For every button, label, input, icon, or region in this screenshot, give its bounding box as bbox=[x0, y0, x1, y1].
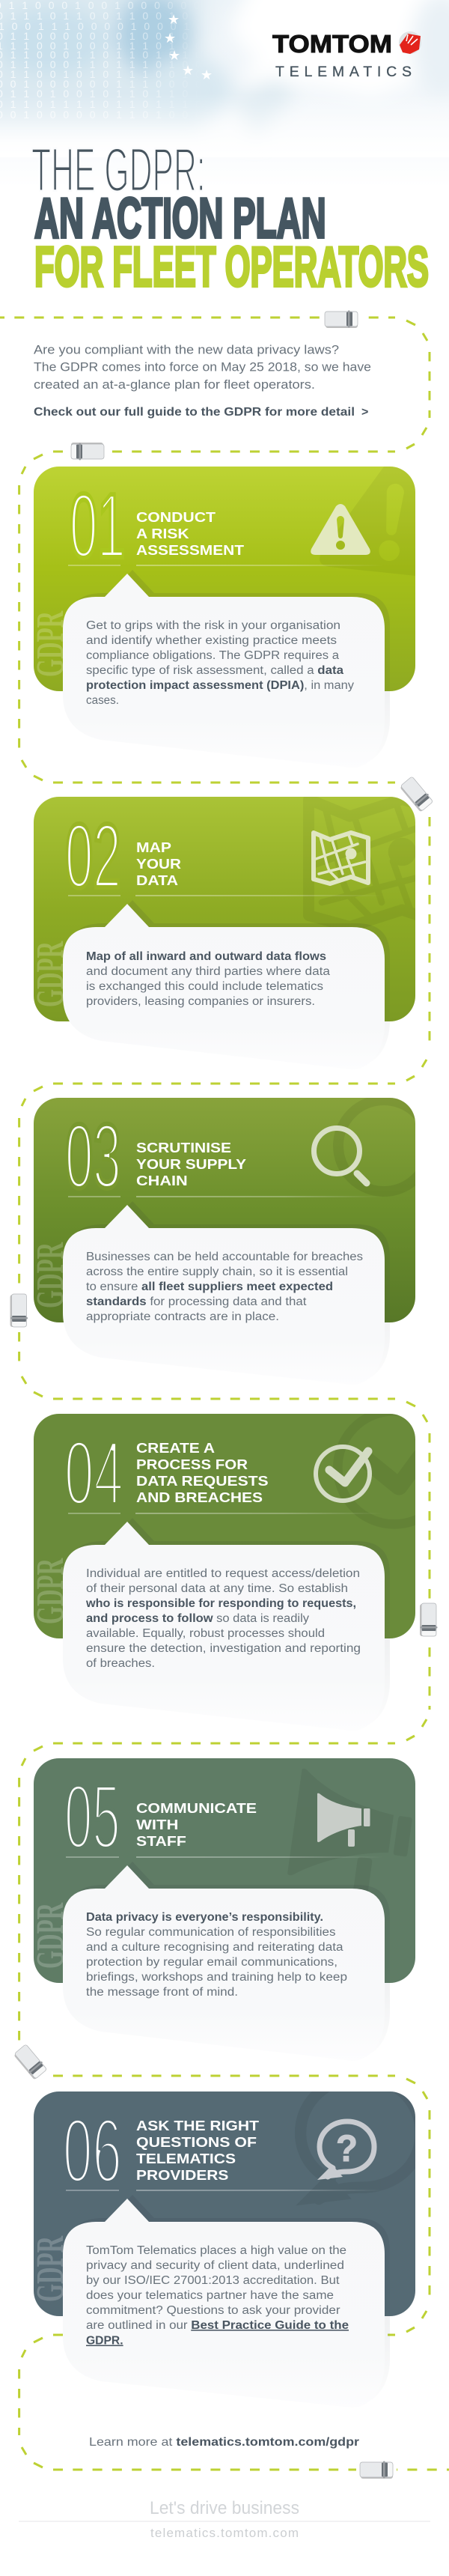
panel: step 06 ask the right questions: GDPR bbox=[29, 2235, 72, 2302]
number 04: 04 bbox=[64, 1423, 123, 1525]
callout with body text: protection impact assessment (DPIA) , in many bbox=[86, 679, 354, 692]
callout with body text bbox=[63, 1522, 385, 1731]
heading: CHAIN bbox=[136, 1173, 188, 1188]
icon: question speech bubble: ? bbox=[336, 2127, 358, 2169]
callout with body text: So regular communication of responsibilities bbox=[86, 1926, 336, 1939]
header background: data and map of Europe: 0 1 1 0 1 0 0 1 0 1 1 0 1 1 0 0 1 bbox=[0, 88, 217, 100]
header background: data and map of Europe: 0 1 1 0 0 0 0 0 0 0 1 0 0 1 0 0 0 bbox=[0, 30, 217, 42]
panel: step 01 conduct a risk assessment: GDPR bbox=[29, 610, 72, 677]
callout with body text: Map of all inward and outward data flows bbox=[86, 950, 326, 963]
van: corner right bbox=[397, 773, 436, 815]
header background: data and map of Europe: 0 1 1 0 0 1 0 1 0 1 1 1 0 0 1 0 0 bbox=[0, 68, 217, 80]
heading: A RISK bbox=[136, 526, 189, 541]
heading bbox=[136, 1441, 269, 1505]
header background: data and map of Europe: 0 1 1 0 1 1 1 1 0 1 1 0 1 1 1 0 0 bbox=[0, 98, 217, 110]
callout with body text: the message front of mind. bbox=[86, 1986, 238, 1999]
callout with body text: compliance obligations. The GDPR requires a bbox=[86, 649, 339, 662]
heading: PROCESS FOR bbox=[136, 1457, 248, 1472]
header background: data and map of Europe: ★ bbox=[168, 12, 180, 27]
logo: TomTom Telematics bbox=[272, 30, 421, 80]
callout with body text: to ensure all fleet suppliers meet expected bbox=[86, 1281, 333, 1293]
heading: DATA bbox=[136, 873, 178, 888]
header background: data and map of Europe: 1 1 1 0 0 1 0 0 0 1 1 1 0 1 0 0 1 bbox=[0, 40, 217, 52]
heading: QUESTIONS OF bbox=[136, 2135, 257, 2150]
icon: question speech bubble bbox=[317, 2121, 374, 2180]
icon: check mark bbox=[316, 1447, 370, 1501]
title: AN ACTION PLAN bbox=[34, 188, 326, 250]
panel: step 04 create a process: GDPR bbox=[29, 1558, 72, 1624]
panel: step 02 map your data bbox=[34, 797, 415, 1036]
callout with body text: by our ISO/IEC 27001:2013 accreditation. But bbox=[86, 2274, 340, 2287]
heading: CONDUCT bbox=[136, 510, 216, 525]
intro text: Are you compliant with the new data privacy laws? bbox=[34, 343, 339, 356]
number 06: 06 bbox=[63, 2100, 122, 2202]
heading: TELEMATICS bbox=[136, 2151, 236, 2166]
title bbox=[31, 135, 429, 299]
footer: telematics.tomtom.com bbox=[150, 2526, 299, 2540]
callout with body text: providers, leasing companies or insurers. bbox=[86, 995, 315, 1008]
van: second row bbox=[67, 443, 108, 460]
van: right side bbox=[420, 1600, 437, 1640]
footer: Let's drive business bbox=[150, 2498, 299, 2518]
callout with body text bbox=[63, 1865, 385, 2061]
callout with body text: and identify whether existing practice meets bbox=[86, 634, 337, 647]
intro text: > bbox=[361, 406, 368, 419]
callout with body text: of breaches. bbox=[86, 1657, 155, 1670]
callout with body text bbox=[63, 2199, 385, 2408]
title: THE GDPR: bbox=[31, 135, 206, 204]
header background: data and map of Europe: ★ bbox=[182, 63, 194, 78]
heading: STAFF bbox=[136, 1834, 186, 1849]
number 02: 02 bbox=[65, 805, 121, 907]
callout with body text: TomTom Telematics places a high value on the bbox=[86, 2244, 346, 2257]
heading bbox=[136, 510, 244, 558]
icon: magnifying glass bbox=[314, 1128, 367, 1183]
header background: data and map of Europe: 0 1 1 0 0 0 1 1 0 1 1 0 1 0 1 0 0 bbox=[0, 49, 217, 61]
callout with body text: and document any third parties where data bbox=[86, 965, 330, 978]
panel: step 05 communicate with staff bbox=[34, 1758, 415, 2022]
header background: data and map of Europe: 0 1 1 0 0 0 1 1 0 1 1 1 0 1 0 0 1 bbox=[0, 58, 217, 70]
heading bbox=[136, 840, 181, 888]
callout with body text: commitment? Questions to ask your provider bbox=[86, 2304, 340, 2317]
van: corner left bbox=[10, 2041, 50, 2083]
heading bbox=[136, 1140, 246, 1188]
learn more line: Learn more at telematics.tomtom.com/gdpr bbox=[89, 2436, 359, 2449]
heading: MAP bbox=[136, 840, 171, 855]
icon: megaphone bbox=[317, 1793, 370, 1847]
heading: YOUR SUPPLY bbox=[136, 1157, 246, 1172]
footer bbox=[19, 2498, 430, 2540]
panel: step 03 scrutinise your supply chain bbox=[34, 1098, 415, 1349]
callout with body text bbox=[63, 574, 385, 768]
callout with body text: and a culture recognising and reiterating data bbox=[86, 1941, 343, 1954]
van: bottom bbox=[356, 2461, 397, 2479]
number 05: 05 bbox=[64, 1766, 120, 1868]
heading: AND BREACHES bbox=[136, 1490, 263, 1505]
heading: SCRUTINISE bbox=[136, 1140, 231, 1155]
heading: PROVIDERS bbox=[136, 2168, 228, 2183]
header background: data and map of Europe bbox=[0, 0, 449, 187]
heading: ASSESSMENT bbox=[136, 543, 244, 558]
panel: step 03 scrutinise your supply chain: GDPR bbox=[29, 1242, 72, 1308]
icon: warning triangle bbox=[311, 504, 370, 555]
header background: data and map of Europe: 0 0 1 0 0 0 0 0 0 1 1 1 0 0 0 0 1 bbox=[0, 78, 217, 90]
heading: CREATE A bbox=[136, 1441, 215, 1456]
callout with body text: cases. bbox=[86, 694, 119, 707]
heading: ASK THE RIGHT bbox=[136, 2118, 259, 2133]
number 01: 01 bbox=[70, 475, 126, 577]
header background: data and map of Europe: ★ bbox=[164, 31, 176, 46]
logo: TomTom Telematics: TELEMATICS bbox=[275, 64, 412, 80]
callout with body text: Get to grips with the risk in your organisation bbox=[86, 619, 340, 632]
callout with body text: across the entire supply chain, so it is essential bbox=[86, 1266, 348, 1278]
callout with body text: Data privacy is everyone’s responsibility. bbox=[86, 1911, 323, 1924]
van: left side bbox=[10, 1290, 28, 1331]
number 03: 03 bbox=[65, 1105, 121, 1207]
callout with body text: and process to follow so data is readily bbox=[86, 1612, 309, 1625]
callout with body text: does your telematics partner have the same bbox=[86, 2289, 334, 2302]
callout with body text: protection by regular email communications, bbox=[86, 1956, 337, 1969]
callout with body text: is exchanged this could include telematics bbox=[86, 980, 323, 993]
callout with body text: of their personal data at any time. So establish bbox=[86, 1582, 348, 1595]
callout with body text: appropriate contracts are in place. bbox=[86, 1310, 279, 1323]
intro text: Check out our full guide to the GDPR for more detail bbox=[34, 406, 355, 419]
callout with body text: privacy and security of client data, underlined bbox=[86, 2259, 344, 2272]
callout with body text: GDPR. bbox=[86, 2335, 123, 2347]
title: FOR FLEET OPERATORS bbox=[34, 236, 429, 299]
panel: step 04 create a process bbox=[34, 1414, 415, 1689]
heading bbox=[136, 1801, 257, 1849]
logo: TomTom Telematics: TOMTOM bbox=[272, 30, 392, 58]
callout with body text: Businesses can be held accountable for breaches bbox=[86, 1251, 363, 1263]
panel: step 02 map your data: GDPR bbox=[29, 941, 72, 1007]
callout with body text bbox=[63, 1205, 385, 1385]
header background: data and map of Europe: 0 1 1 1 0 1 1 0 0 1 1 0 0 1 0 1 1 bbox=[0, 10, 217, 22]
callout with body text: are outlined in our Best Practice Guide to the bbox=[86, 2319, 349, 2332]
header background: data and map of Europe: 1 0 0 1 1 1 0 0 0 0 1 0 0 0 1 0 1 bbox=[0, 20, 219, 32]
panel: step 05 communicate with staff: GDPR bbox=[29, 1902, 72, 1969]
callout with body text: who is responsible for responding to requests, bbox=[85, 1597, 356, 1610]
callout with body text: standards for processing data and that bbox=[86, 1295, 307, 1308]
heading: YOUR bbox=[136, 857, 181, 872]
callout with body text: available. Equally, robust processes should bbox=[86, 1627, 325, 1640]
van: top bbox=[321, 310, 361, 328]
header background: data and map of Europe: ★ bbox=[201, 67, 213, 82]
intro text: created an at-a-glance plan for fleet operators. bbox=[34, 378, 315, 392]
callout with body text: ensure the detection, investigation and reporting bbox=[86, 1642, 361, 1655]
callout with body text bbox=[63, 904, 385, 1069]
heading: DATA REQUESTS bbox=[136, 1474, 269, 1489]
intro text: The GDPR comes into force on May 25 2018, so we have bbox=[34, 361, 371, 374]
callout with body text: Individual are entitled to request access/deletion bbox=[86, 1567, 360, 1580]
panel: step 06 ask the right questions bbox=[34, 2092, 415, 2366]
icon: map bbox=[314, 833, 368, 884]
header background: data and map of Europe: 0 0 1 0 0 0 0 0 0 1 1 0 1 0 0 0 1 bbox=[0, 109, 217, 121]
intro text bbox=[34, 343, 371, 419]
heading: WITH bbox=[136, 1817, 178, 1832]
header background: data and map of Europe: ★ bbox=[168, 48, 180, 63]
heading: COMMUNICATE bbox=[136, 1801, 257, 1816]
heading bbox=[136, 2118, 259, 2183]
callout with body text: specific type of risk assessment, called a data bbox=[86, 664, 343, 677]
callout with body text: briefings, workshops and training help to keep bbox=[86, 1971, 347, 1984]
panel: step 01 conduct a risk assessment bbox=[34, 467, 415, 729]
